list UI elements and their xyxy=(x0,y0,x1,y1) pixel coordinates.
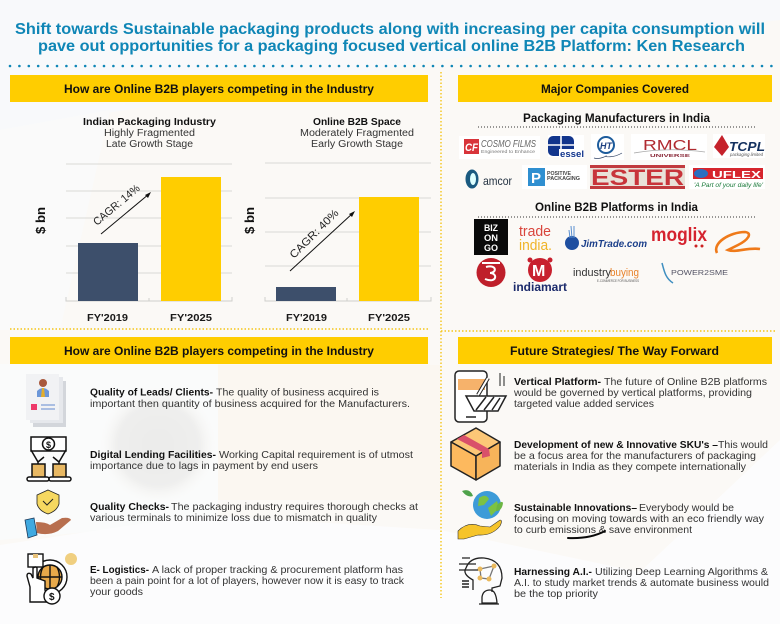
chart: Indian packaging industry xyxy=(34,117,232,324)
item: digital lending xyxy=(90,450,413,472)
icon: digital lending: $ xyxy=(46,440,51,450)
panel: future strategies xyxy=(451,337,772,604)
chart: online B2B space: CAGR: 40% xyxy=(288,207,342,261)
item: quality checks: The packaging industry requires thorough checks at xyxy=(171,502,418,513)
logo: Amcor: amcor xyxy=(483,174,512,188)
icon: AI head xyxy=(459,558,502,604)
item: vertical platform: The future of Online B2B platforms xyxy=(604,377,767,388)
item: harnessing AI: be the top priority xyxy=(514,589,599,600)
item: harnessing AI xyxy=(514,567,769,600)
logo: Bizongo xyxy=(474,219,508,255)
item: new SKUs: be a focus area for the manufacturers of packaging xyxy=(514,451,756,462)
panel: competition factors xyxy=(10,337,428,604)
logo: Trade India xyxy=(519,223,552,254)
logo: Industrybuying xyxy=(573,267,640,283)
logo: Uflex xyxy=(689,165,765,189)
item: vertical platform xyxy=(513,377,767,410)
icon: e-logistics xyxy=(27,553,77,604)
logo: Indiamart: indiamart xyxy=(513,280,567,294)
logo: Positive Packaging: PACKAGING xyxy=(547,176,580,182)
heading: major companies: Major Companies Covered xyxy=(541,84,689,96)
logo: TCPL: packaging limited xyxy=(729,152,763,157)
icon: e-logistics: $ xyxy=(49,592,55,603)
chart: online B2B space: $ bn xyxy=(243,207,257,234)
logo: Indiamart: M xyxy=(532,263,545,280)
logo: JimTrade: JimTrade.com xyxy=(581,239,647,250)
chart: online B2B space xyxy=(243,117,431,324)
item: quality checks xyxy=(90,502,418,524)
heading: market comparison xyxy=(10,75,428,102)
icon: client documents xyxy=(26,374,66,427)
icon: vertical platform xyxy=(455,371,506,422)
title xyxy=(15,21,765,55)
logo: Essel: essel xyxy=(560,149,584,160)
item: sustainable innovations xyxy=(514,503,765,536)
item: vertical platform: targeted value added services xyxy=(514,399,654,410)
item: e-logistics: been a pain point for a lot of players, however now it is easy to track xyxy=(90,576,405,587)
item: quality checks: various terminals to minimize loss due to mismatch in quality xyxy=(90,513,378,524)
item: digital lending: importance due to lags in payment by end users xyxy=(90,461,318,472)
item: quality of leads: important then quantity of business acquired for the Manufacturers. xyxy=(90,399,410,410)
item: e-logistics: A lack of proper tracking & procurement platform has xyxy=(152,565,403,576)
heading: competition factors xyxy=(10,337,428,364)
logo: Cosmo Films xyxy=(459,136,540,159)
logo: Positive Packaging: P xyxy=(531,170,541,187)
logo: Ester: ESTER xyxy=(591,165,684,190)
panel: major companies xyxy=(458,75,772,294)
heading: future strategies: Future Strategies/ The Way Forward xyxy=(510,346,719,358)
item: e-logistics: your goods xyxy=(90,587,143,598)
logo: Positive Packaging xyxy=(522,165,587,189)
chart: Indian packaging industry: Late Growth Stage xyxy=(106,139,193,150)
chart: Indian packaging industry: FY'2019 xyxy=(87,312,128,324)
chart: online B2B space: Early Growth Stage xyxy=(311,139,403,150)
logo: HT xyxy=(591,134,624,160)
logo: RMCL: UNIVERSE xyxy=(650,153,690,158)
title: Shift towards Sustainable packaging products along with increasing per capita consumption will xyxy=(15,21,765,38)
logo: Amcor xyxy=(466,170,512,188)
logo: Industrybuying: industry xyxy=(573,267,611,279)
chart: Indian packaging industry: $ bn xyxy=(34,207,48,234)
panel: market comparison xyxy=(10,75,431,324)
logo: TCPL xyxy=(713,134,765,158)
logo: Uflex: UFLEX xyxy=(712,170,761,181)
item: sustainable innovations: Sustainable Innovations– xyxy=(514,503,637,514)
logo: Cosmo Films: Engineered to Enhance xyxy=(481,149,536,154)
item: harnessing AI: A.I. to study market trends & automate business would xyxy=(514,578,769,589)
chart: online B2B space: FY'2025 xyxy=(368,312,410,324)
item: vertical platform: would be governed by vertical platforms, providing xyxy=(513,388,752,399)
heading: major companies xyxy=(458,75,772,102)
item: sustainable innovations: to curb emissions & save environment xyxy=(514,525,692,536)
subheading: online platforms: Online B2B Platforms in India xyxy=(535,200,698,214)
icon: digital lending xyxy=(27,437,71,481)
logo: Uflex: 'A Part of your daily life' xyxy=(694,183,764,189)
logo: Essel xyxy=(548,135,584,160)
item: vertical platform: Vertical Platform- xyxy=(514,377,602,388)
item: harnessing AI: Utilizing Deep Learning Algorithms & xyxy=(595,567,768,578)
chart: online B2B space: Online B2B Space xyxy=(313,117,401,128)
annotation: hand-drawn underline xyxy=(568,531,605,538)
item: new SKUs: materials in India as they compete internationally xyxy=(514,462,747,473)
item: harnessing AI: Harnessing A.I.- xyxy=(514,567,593,578)
item: sustainable innovations: focusing on moving towards with an eco friendly way xyxy=(514,514,765,525)
item: new SKUs: Development of new & Innovative SKU's – xyxy=(514,440,718,451)
logo: RMCL: RMCL xyxy=(643,137,697,154)
title: pave out opportunities for a packaging focused vertical online B2B Platform: Ken Research xyxy=(38,38,745,55)
logo: Alibaba xyxy=(716,232,760,253)
chart: Indian packaging industry: CAGR: 14% xyxy=(91,182,143,228)
logo: red circle xyxy=(476,258,506,287)
chart: online B2B space: FY'2019 xyxy=(286,312,327,324)
icon: quality check xyxy=(25,490,71,538)
chart: Indian packaging industry: Highly Fragmented xyxy=(104,128,195,139)
heading: future strategies xyxy=(458,337,772,364)
item: e-logistics: E- Logistics- xyxy=(90,565,150,576)
logo: Bizongo: ON xyxy=(484,233,498,244)
logo: Bizongo: GO xyxy=(484,243,498,254)
logo: Industrybuying: buying xyxy=(610,267,639,279)
chart: Indian packaging industry: Indian Packaging Industry xyxy=(83,117,216,128)
logo: Power2SME xyxy=(662,263,728,283)
logo: Industrybuying: E-COMMERCE FOR BUSINESS xyxy=(597,279,640,283)
logo: Trade India: india. xyxy=(519,237,552,254)
logo: Cosmo Films: CF xyxy=(465,142,478,154)
logo: Power2SME: POWER2SME xyxy=(671,270,728,277)
item: sustainable innovations: Everybody would be xyxy=(639,503,734,514)
logo: Positive Packaging: POSITIVE xyxy=(547,171,572,177)
chart: Indian packaging industry: FY'2025 xyxy=(170,312,212,324)
logo: Indiamart xyxy=(513,258,567,294)
subheading: packaging manufacturers: Packaging Manufacturers in India xyxy=(523,111,710,125)
item: e-logistics xyxy=(90,565,405,598)
chart: online B2B space: Moderately Fragmented xyxy=(300,128,414,139)
item: quality of leads xyxy=(90,388,410,410)
item: quality of leads: Quality of Leads/ Clients- xyxy=(90,388,214,398)
logo: Trade India: trade xyxy=(519,223,551,240)
logo: RMCL xyxy=(631,134,707,160)
logo: HT: HT xyxy=(600,141,613,151)
logo: Bizongo: BIZ xyxy=(484,223,498,234)
logo: Moglix: moglix xyxy=(651,225,707,246)
item: new SKUs: This would xyxy=(718,440,768,451)
item: new SKUs xyxy=(514,440,768,473)
icon: cardboard box xyxy=(451,428,500,480)
logo: JimTrade xyxy=(565,226,647,250)
item: digital lending: Working Capital requirement is of utmost xyxy=(219,450,413,461)
icon: sustainable globe xyxy=(458,490,503,539)
item: quality of leads: The quality of business acquired is xyxy=(216,388,379,398)
item: quality checks: Quality Checks- xyxy=(90,502,170,513)
item: digital lending: Digital Lending Facilities- xyxy=(90,450,217,461)
logo: Cosmo Films: COSMO FILMS xyxy=(481,139,536,150)
heading: market comparison: How are Online B2B players competing in the Industry xyxy=(64,84,375,96)
heading: competition factors: How are Online B2B players competing in the Industry xyxy=(64,346,375,358)
logo: TCPL: TCPL xyxy=(729,139,765,154)
